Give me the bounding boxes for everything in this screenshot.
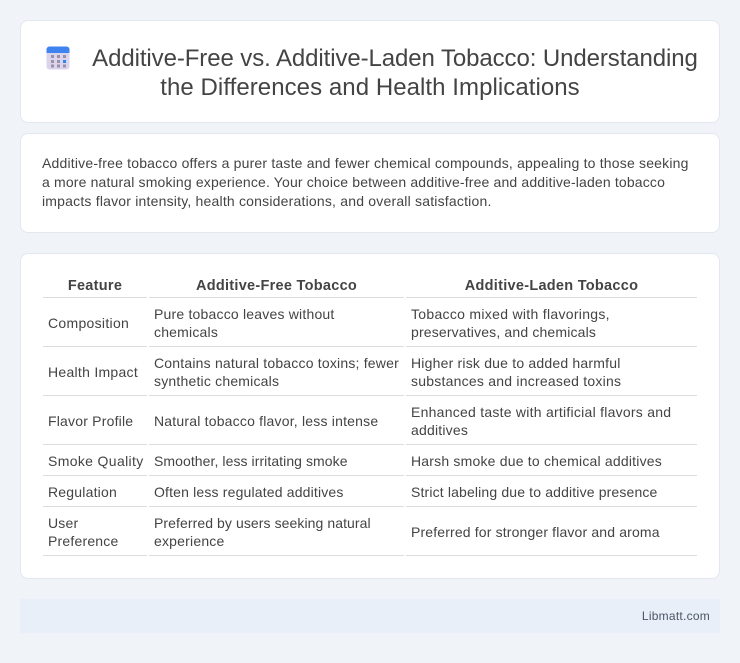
row: composition: preservatives, and chemicals	[411, 324, 596, 340]
row: user preference: experience	[154, 533, 224, 549]
footer credit: Libmatt.com	[642, 609, 710, 623]
row: smoke quality: Smoke Quality	[48, 453, 144, 469]
icon: calendar	[46, 46, 70, 70]
row: composition	[48, 306, 610, 340]
row: regulation: Regulation	[48, 484, 117, 500]
intro panel	[20, 133, 720, 233]
row: smoke quality: Smoother, less irritating smoke	[154, 453, 348, 469]
row: user preference: Preference	[48, 533, 118, 549]
row: health impact	[48, 355, 621, 389]
footer bar	[20, 599, 720, 633]
row: health impact: Contains natural tobacco toxins; fewer	[154, 355, 399, 371]
intro text	[42, 155, 689, 209]
row: user preference	[48, 515, 660, 549]
table header: Additive-Laden Tobacco	[465, 278, 638, 294]
row: composition: chemicals	[154, 324, 218, 340]
title: Additive-Free vs. Additive-Laden Tobacco: Understanding	[92, 45, 698, 72]
table header: Feature	[68, 278, 122, 294]
title	[92, 45, 698, 101]
row: user preference: Preferred for stronger flavor and aroma	[411, 524, 660, 540]
row: flavor profile: Flavor Profile	[48, 413, 133, 429]
row: flavor profile: additives	[411, 422, 468, 438]
comparison table	[43, 278, 697, 556]
row: flavor profile	[48, 404, 671, 438]
row: user preference: User	[48, 515, 78, 531]
row: smoke quality: Harsh smoke due to chemical additives	[411, 453, 662, 469]
row: regulation: Often less regulated additives	[154, 484, 344, 500]
row: health impact: substances and increased toxins	[411, 373, 621, 389]
comparison table panel	[20, 253, 720, 579]
row: flavor profile: Enhanced taste with artificial flavors and	[411, 404, 671, 420]
row: health impact: Higher risk due to added harmful	[411, 355, 621, 371]
title: the Differences and Health Implications	[160, 74, 580, 101]
intro text: Additive-free tobacco offers a purer taste and fewer chemical compounds, appealing to those seeking	[42, 155, 689, 171]
row: flavor profile: Natural tobacco flavor, less intense	[154, 413, 378, 429]
row: health impact: synthetic chemicals	[154, 373, 279, 389]
row: smoke quality	[48, 453, 662, 469]
row: user preference: Preferred by users seeking natural	[154, 515, 371, 531]
row: regulation	[48, 484, 657, 500]
row: regulation: Strict labeling due to additive presence	[411, 484, 657, 500]
header panel	[20, 20, 720, 123]
table header	[68, 278, 638, 294]
row: composition: Tobacco mixed with flavorings,	[411, 306, 610, 322]
intro text: a more natural smoking experience. Your choice between additive-free and additive-laden tobacco	[42, 174, 665, 190]
row: composition: Pure tobacco leaves without	[154, 306, 335, 322]
row: composition: Composition	[48, 315, 129, 331]
intro text: impacts flavor intensity, health considerations, and overall satisfaction.	[42, 193, 492, 209]
table header: Additive-Free Tobacco	[196, 278, 357, 294]
row: health impact: Health Impact	[48, 364, 138, 380]
